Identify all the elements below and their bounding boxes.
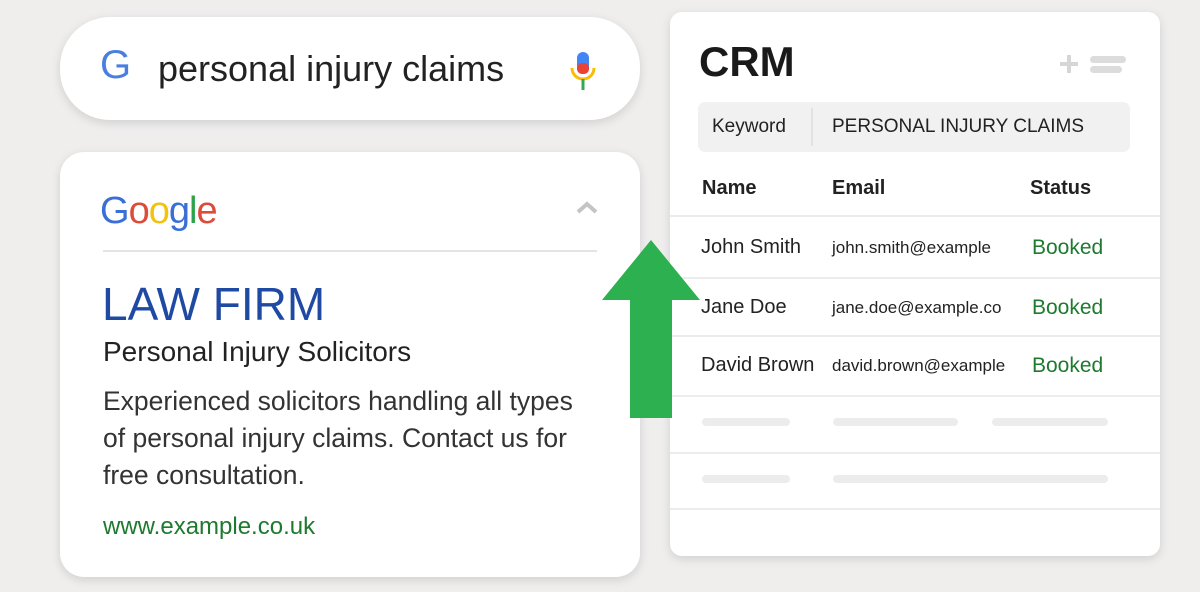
- ad description: free consultation.: [103, 460, 305, 490]
- ad description: Experienced solicitors handling all types: [103, 386, 573, 416]
- panel: CRM: Email: [832, 177, 885, 199]
- keyword filter: Keyword: [712, 116, 786, 137]
- panel: CRM: Booked: [1032, 296, 1103, 319]
- panel: CRM: Jane Doe: [701, 296, 787, 318]
- ad description: of personal injury claims. Contact us for: [103, 423, 567, 453]
- panel: CRM: jane.doe@example.co: [832, 298, 1001, 317]
- panel: CRM: john.smith@example: [832, 238, 991, 257]
- panel: CRM: John Smith: [701, 236, 801, 258]
- row: Jane Doe: [701, 296, 1103, 319]
- search bar: [60, 17, 640, 120]
- CRM title: CRM: [699, 38, 795, 85]
- icon: chevron up: [576, 202, 598, 214]
- ad card: [60, 152, 640, 577]
- row: David Brown: [701, 354, 1103, 377]
- ad description: [103, 386, 573, 490]
- keyword filter: [698, 102, 1130, 152]
- arrow: up: [602, 240, 700, 418]
- panel: CRM: david.brown@example: [832, 356, 1005, 375]
- panel: CRM: Booked: [1032, 236, 1103, 259]
- icon: microphone: [570, 52, 596, 90]
- keyword filter: PERSONAL INJURY CLAIMS: [832, 116, 1084, 137]
- table header: [702, 177, 1091, 199]
- panel: CRM: David Brown: [701, 354, 814, 376]
- panel: CRM: Booked: [1032, 354, 1103, 377]
- panel: CRM: [670, 12, 1160, 556]
- row: John Smith: [701, 236, 1103, 259]
- icon: plus and menu: [1060, 55, 1126, 73]
- icon: google G: G: [100, 43, 131, 87]
- google logo: Google: [100, 190, 217, 232]
- ad url: www.example.co.uk: [103, 513, 315, 540]
- placeholder rows: [670, 418, 1160, 510]
- search query text: personal injury claims: [158, 48, 504, 89]
- ad subtitle: Personal Injury Solicitors: [103, 336, 411, 367]
- panel: CRM: Status: [1030, 177, 1091, 199]
- panel: CRM: Name: [702, 177, 756, 199]
- ad headline: LAW FIRM: [102, 278, 325, 330]
